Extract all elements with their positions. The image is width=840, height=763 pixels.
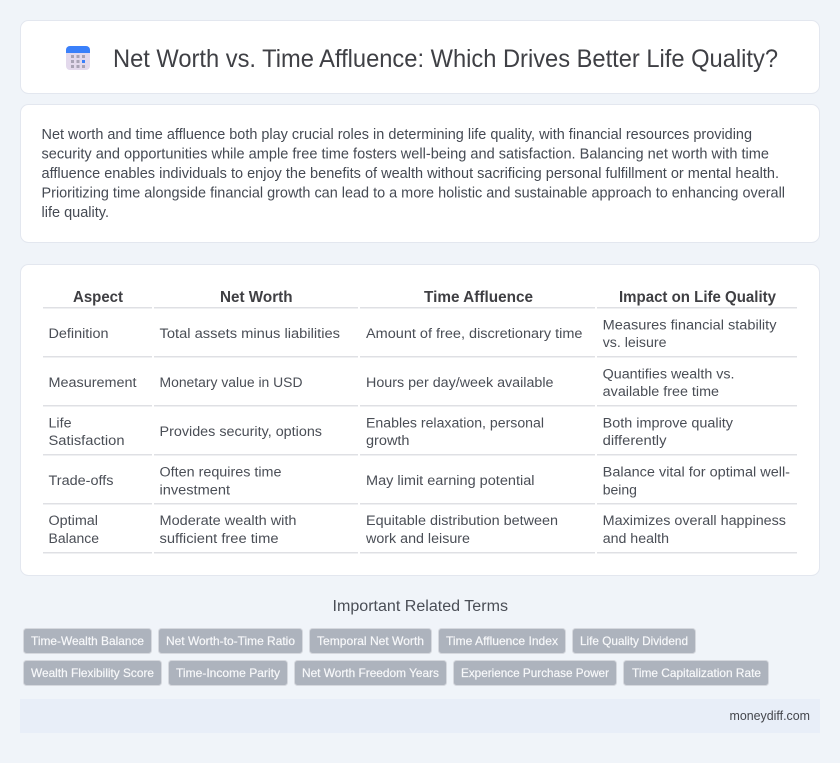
related terms tags: Time-Income Parity [176,666,280,680]
related terms tags: Net Worth Freedom Years [302,666,439,680]
related terms tags: Time Capitalization Rate [632,666,761,680]
icon: calendar [66,46,90,70]
intro text: life quality. [42,205,109,221]
row: optimal balance: Optimal [48,513,98,529]
related terms tags [24,628,768,686]
footer [20,699,820,733]
row: life satisfaction: Life [48,415,72,431]
panel: header [20,20,820,94]
row: optimal balance: and health [603,531,669,547]
row: life satisfaction: differently [603,433,667,449]
row: definition: vs. leisure [603,335,667,351]
table header row: Impact on Life Quality [619,289,776,306]
intro text: Net worth and time affluence both play crucial roles in determining life quality, with financial resources providing [42,127,752,143]
row: optimal balance: sufficient free time [160,531,279,547]
heading: related terms: Important Related Terms [332,598,508,615]
related terms tags: Life Quality Dividend [580,634,688,648]
related terms tags: Wealth Flexibility Score [31,666,154,680]
intro text: affluence enables individuals to enjoy the benefits of wealth without sacrificing personal fulfillment or mental health. [42,166,779,182]
row: life satisfaction: Satisfaction [48,433,124,449]
table header row: Time Affluence [424,289,533,306]
row: life satisfaction: Both improve quality [603,415,734,431]
row: trade-offs: Balance vital for optimal well- [603,464,790,480]
row: trade-offs [48,464,790,498]
table header row: Aspect [73,289,124,306]
row: life satisfaction: growth [366,433,410,449]
row: measurement: Quantifies wealth vs. [603,366,734,382]
row: optimal balance [48,513,786,547]
related terms tags: Time Affluence Index [446,634,558,648]
related terms tags: Experience Purchase Power [461,666,609,680]
row: measurement [48,366,734,400]
intro text [42,127,785,221]
related terms tags: Time-Wealth Balance [31,634,144,648]
row: definition: Amount of free, discretionary time [366,326,583,342]
intro text: security and opportunities while ample free time fosters well-being and satisfaction. Balancing net worth with time [42,146,769,162]
row: life satisfaction [48,415,734,449]
row: trade-offs: May limit earning potential [366,473,534,489]
panel: introduction [20,104,820,242]
row: measurement: Monetary value in USD [160,375,302,391]
panel: comparison table [20,264,820,576]
row: definition: Total assets minus liabilities [160,326,340,342]
row: trade-offs: Trade-offs [48,473,114,489]
footer: moneydiff.com [730,709,810,723]
row: optimal balance: Balance [48,531,99,547]
table header row [73,289,776,306]
row: trade-offs: Often requires time [160,464,282,480]
intro text: Prioritizing time alongside financial growth can lead to a more holistic and sustainable approach to enhancing overall [42,186,785,202]
row: optimal balance: Maximizes overall happiness [603,513,786,529]
row: optimal balance: Moderate wealth with [160,513,296,529]
row: optimal balance: work and leisure [365,531,470,547]
table header row: Net Worth [220,289,292,306]
related terms tags: Net Worth-to-Time Ratio [166,634,295,648]
row: definition: Definition [48,326,108,342]
row: measurement: available free time [603,384,719,400]
related terms tags: Temporal Net Worth [317,634,424,648]
title: Net Worth vs. Time Affluence: Which Drives Better Life Quality? [113,45,778,73]
row: optimal balance: Equitable distribution between [366,513,558,529]
row: life satisfaction: Provides security, options [160,424,322,440]
row: measurement: Hours per day/week available [366,375,554,391]
row: measurement: Measurement [48,375,137,391]
row: definition: Measures financial stability [603,318,777,334]
row: life satisfaction: Enables relaxation, personal [366,415,544,431]
row: trade-offs: being [603,482,637,498]
row: definition [48,318,777,351]
row: trade-offs: investment [160,482,230,498]
